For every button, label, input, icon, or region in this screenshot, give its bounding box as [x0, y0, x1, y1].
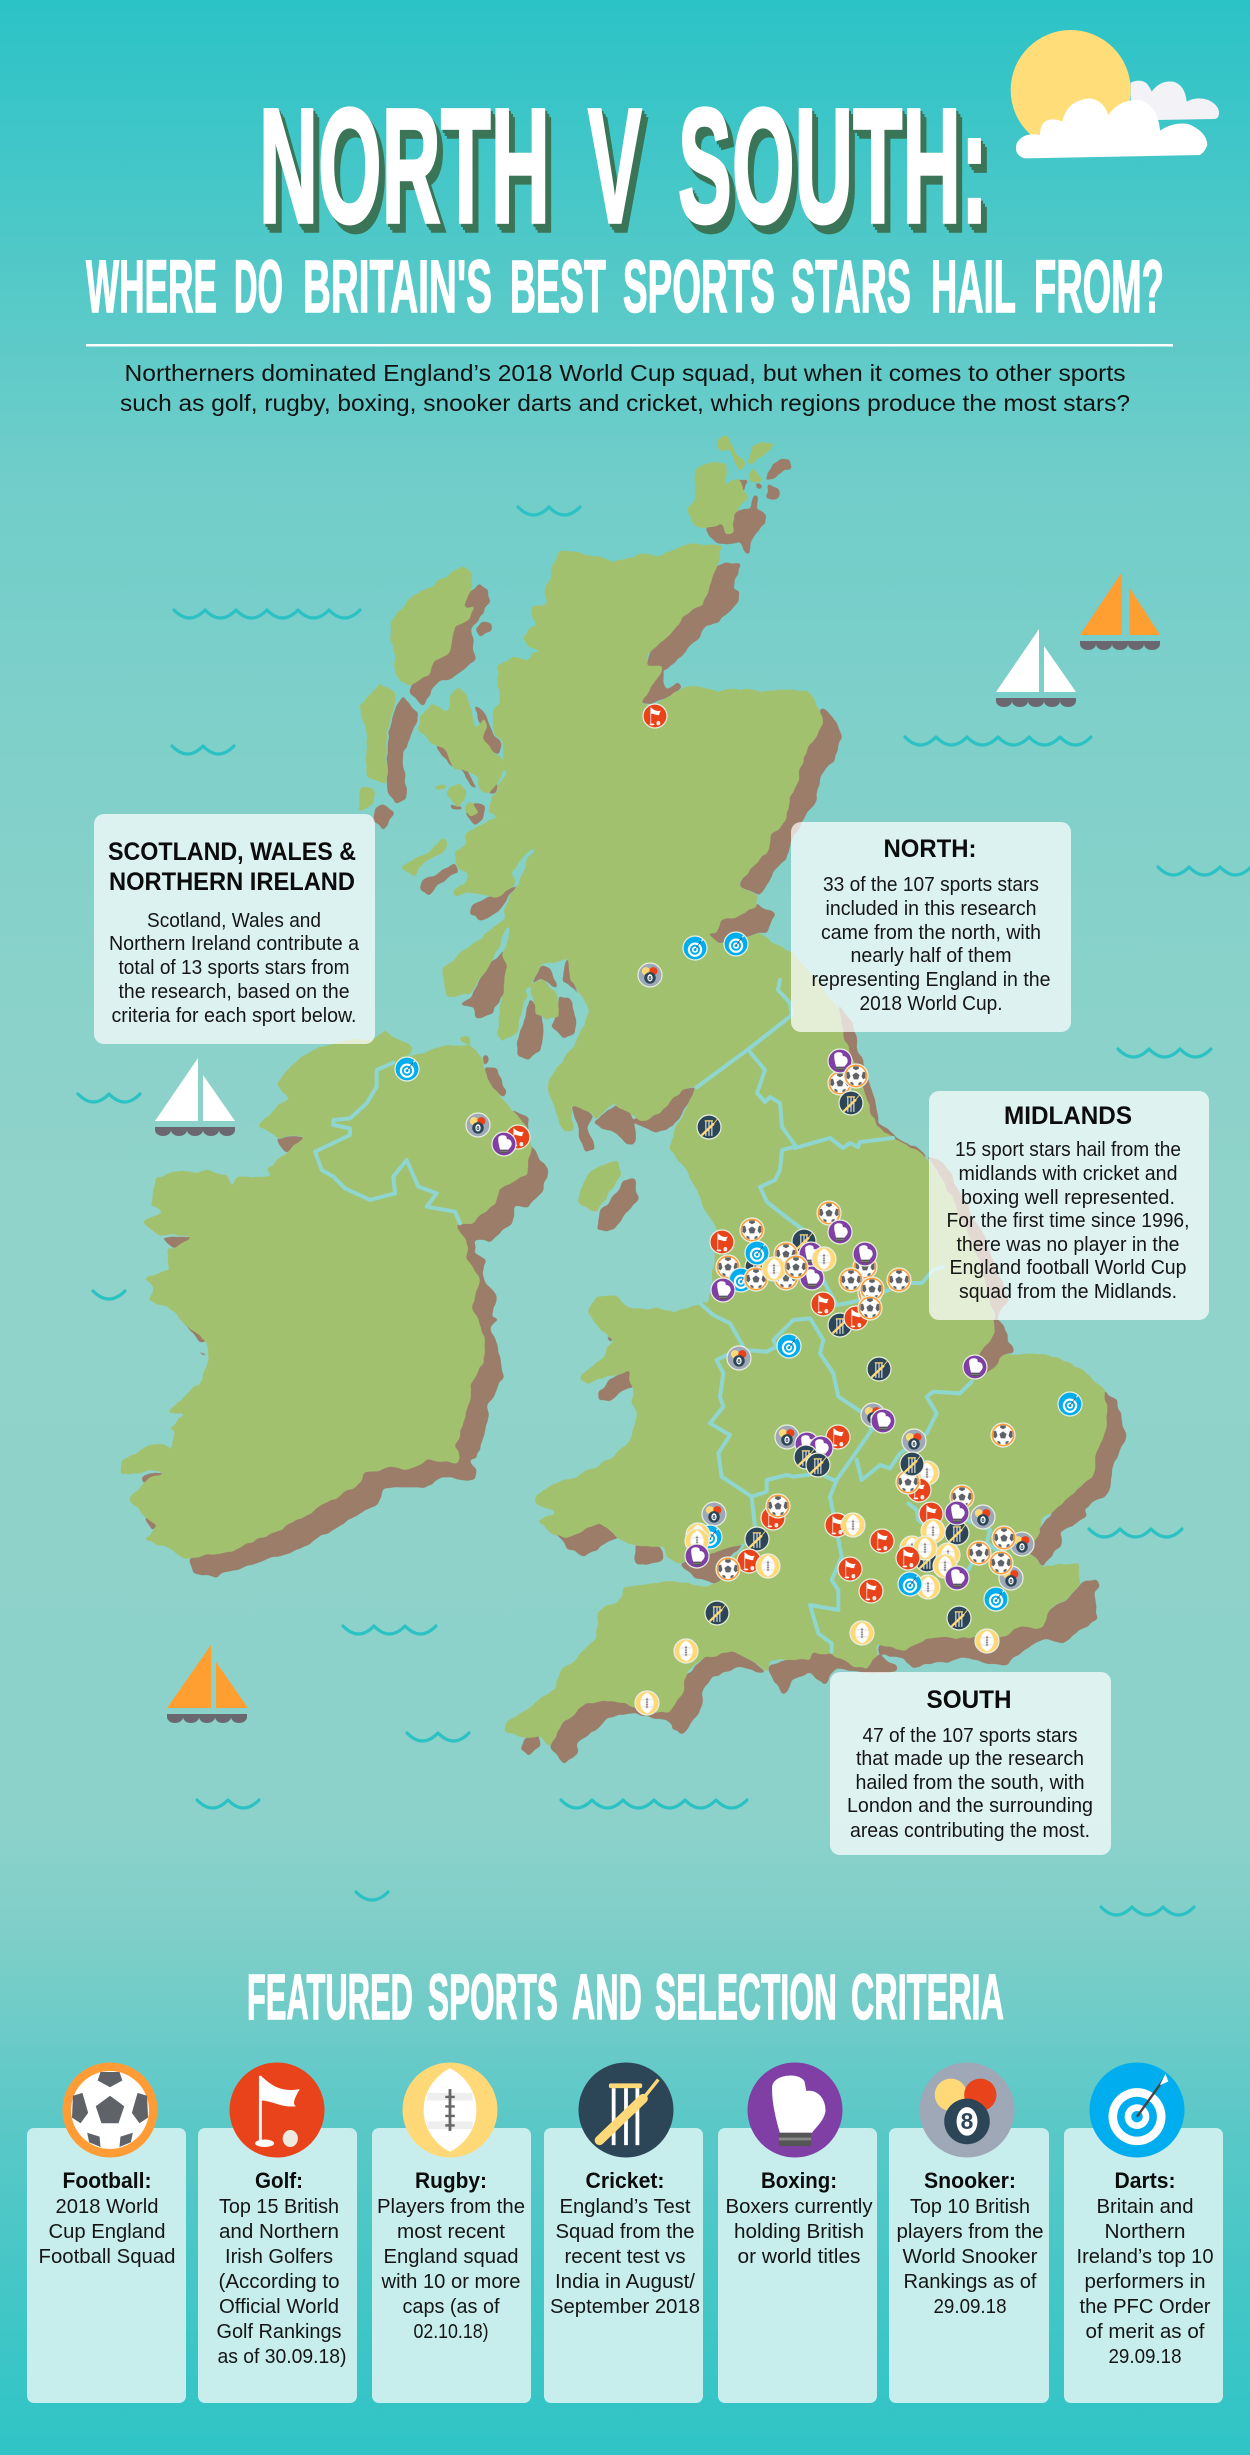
pin: cricket — [839, 1091, 863, 1115]
panel heading: SOUTH — [926, 1686, 1012, 1714]
pin: football — [774, 1266, 798, 1290]
panel heading: NORTHERN IRELAND — [109, 868, 355, 896]
pin: boxing — [711, 1278, 735, 1302]
section heading: featured sports: SELECTION — [655, 1961, 837, 2033]
card text — [726, 2168, 872, 2268]
card text: India in August/ — [555, 2271, 695, 2293]
panel body text: Northern Ireland contribute a — [109, 933, 360, 955]
card text: 2018 World — [56, 2196, 158, 2218]
pin: football — [784, 1255, 808, 1279]
pin: football — [853, 1255, 877, 1279]
pin: football — [774, 1242, 798, 1266]
panel body text: midlands with cricket and — [958, 1163, 1178, 1185]
pin: football — [817, 1201, 841, 1225]
panel body text — [812, 874, 1050, 1015]
decorative sea waves — [78, 507, 1250, 1915]
pin: golf — [737, 1549, 761, 1573]
subtitle: STARS — [791, 245, 911, 328]
panel body text: 47 of the 107 sports stars — [862, 1725, 1078, 1747]
icon: rugby — [402, 2062, 498, 2158]
icon: golf — [230, 2062, 324, 2158]
panel: Scotland, Wales and Northern Ireland — [94, 814, 375, 1044]
title: V — [588, 74, 642, 257]
panel body text: the research, based on the — [118, 981, 350, 1003]
pin: rugby — [841, 1513, 865, 1537]
panel body text: that made up the research — [856, 1748, 1084, 1770]
pin: snooker — [861, 1403, 885, 1427]
pin: golf — [919, 1502, 943, 1526]
pin: cricket — [705, 1601, 729, 1625]
card text: and Northern — [219, 2221, 339, 2243]
pin: football — [716, 1557, 740, 1581]
panel: Midlands — [929, 1091, 1209, 1320]
pin: golf — [506, 1125, 530, 1149]
pin: rugby — [762, 1257, 786, 1281]
panel body text — [109, 910, 360, 1027]
pin: football — [716, 1255, 740, 1279]
card text: Rugby: — [415, 2168, 487, 2193]
pin: boxing — [945, 1501, 969, 1525]
pin: cricket — [915, 1548, 939, 1572]
pin: rugby — [812, 1247, 836, 1271]
panel body text: For the first time since 1996, — [946, 1210, 1190, 1232]
pin: football — [766, 1494, 790, 1518]
panel body text: boxing well represented. — [961, 1187, 1175, 1209]
pin: football — [828, 1071, 852, 1095]
card text: Northern — [1104, 2221, 1186, 2243]
panel body text: included in this research — [826, 898, 1036, 920]
card: cricket — [544, 2062, 703, 2403]
card: snooker — [889, 2062, 1049, 2403]
pin: boxing — [795, 1432, 819, 1456]
pin: football — [844, 1064, 868, 1088]
pin: football — [839, 1268, 863, 1292]
pin: cricket — [792, 1229, 816, 1253]
panel: South — [830, 1672, 1111, 1855]
pin: darts — [729, 1268, 753, 1292]
subtitle: BRITAIN'S — [303, 245, 492, 328]
panel body text: criteria for each sport below. — [112, 1005, 356, 1027]
card text: Golf Rankings — [216, 2321, 342, 2343]
pin: darts — [898, 1572, 922, 1596]
icon: orange sailboat bottom — [167, 1645, 248, 1723]
icon: cricket — [578, 2062, 674, 2158]
card text — [550, 2168, 700, 2318]
subtitle: SPORTS — [623, 245, 775, 328]
card text: Top 15 British — [219, 2196, 339, 2218]
pin: football — [896, 1470, 920, 1494]
pin: boxing — [492, 1132, 516, 1156]
card: football — [27, 2062, 186, 2403]
subtitle: WHERE — [86, 245, 217, 328]
card text: holding British — [734, 2221, 864, 2243]
section heading: featured sports: FEATURED — [247, 1961, 413, 2033]
panel body text: England football World Cup — [950, 1257, 1186, 1279]
pin: darts — [984, 1587, 1008, 1611]
card text: the PFC Order — [1080, 2296, 1211, 2318]
pin: golf — [907, 1478, 931, 1502]
card text: Rankings as of — [904, 2271, 1037, 2293]
pin: football — [967, 1541, 991, 1565]
pin: darts — [777, 1334, 801, 1358]
pin: boxing — [828, 1220, 852, 1244]
pin: darts — [724, 932, 748, 956]
card text — [216, 2168, 346, 2368]
card text: World Snooker — [902, 2246, 1038, 2268]
card text: Squad from the — [556, 2221, 694, 2243]
intro text: Northerners dominated England’s 2018 World Cup squad, but when it comes to other sports — [124, 360, 1126, 386]
card: darts — [1064, 2062, 1223, 2403]
pin: football — [992, 1526, 1016, 1550]
card text — [377, 2168, 525, 2343]
panel body text: London and the surrounding — [847, 1795, 1093, 1817]
panel heading: MIDLANDS — [1004, 1102, 1132, 1130]
pin: boxing — [828, 1049, 852, 1073]
pin: football — [991, 1423, 1015, 1447]
panel body text: areas contributing the most. — [850, 1820, 1090, 1842]
section heading: featured sports: CRITERIA — [851, 1961, 1004, 2033]
map: coastline shadow — [142, 460, 1125, 1765]
panel heading: NORTH: — [884, 835, 976, 863]
card text: September 2018 — [550, 2296, 700, 2318]
icon: white sailboat left — [155, 1058, 235, 1136]
pin: darts — [745, 1241, 769, 1265]
pin: football — [858, 1296, 882, 1320]
card text: (According to — [218, 2271, 340, 2293]
panel body text: squad from the Midlands. — [959, 1281, 1177, 1303]
card text: Britain and — [1096, 2196, 1194, 2218]
pin: cricket — [806, 1453, 830, 1477]
subtitle: DO — [234, 245, 283, 328]
card text: Irish Golfers — [225, 2246, 333, 2268]
pin: football — [740, 1218, 764, 1242]
icon: darts — [1090, 2062, 1184, 2158]
pin: boxing — [685, 1544, 709, 1568]
pin: golf — [811, 1292, 835, 1316]
pin: golf — [710, 1230, 734, 1254]
panel body text: representing England in the — [812, 969, 1050, 991]
pin: darts — [395, 1057, 419, 1081]
pin: football — [744, 1267, 768, 1291]
icon: boxing — [748, 2062, 842, 2158]
pin: boxing — [945, 1566, 969, 1590]
pin: cricket — [745, 1255, 769, 1279]
pin: cricket — [945, 1521, 969, 1545]
card text: Cricket: — [586, 2168, 664, 2193]
pin: boxing — [809, 1436, 833, 1460]
pin: cricket — [828, 1313, 852, 1337]
card text: players from the — [896, 2221, 1044, 2243]
map pins — [395, 704, 1082, 1715]
panel body text: total of 13 sports stars from — [118, 957, 350, 979]
panel heading: SCOTLAND, WALES & — [108, 838, 356, 866]
pin: boxing — [800, 1266, 824, 1290]
pin: rugby — [913, 1536, 937, 1560]
pin: football — [860, 1277, 884, 1301]
panel body text — [946, 1139, 1190, 1303]
pin: snooker — [775, 1425, 799, 1449]
pin: rugby — [674, 1639, 698, 1663]
icon: orange sailboat top — [1080, 572, 1160, 650]
card text: Football: — [62, 2168, 152, 2193]
card text — [1076, 2168, 1214, 2368]
pin: football — [950, 1485, 974, 1509]
pin: snooker — [1010, 1532, 1034, 1556]
pin: golf — [859, 1579, 883, 1603]
pin: rugby — [900, 1536, 924, 1560]
section heading: featured sports: AND — [572, 1961, 642, 2033]
pin: snooker — [971, 1505, 995, 1529]
card text: 02.10.18) — [414, 2321, 488, 2343]
card: rugby — [372, 2062, 531, 2403]
pin: rugby — [756, 1554, 780, 1578]
intro text: such as golf, rugby, boxing, snooker darts and cricket, which regions produce the most stars? — [120, 390, 1130, 416]
card text: Players from the — [377, 2196, 525, 2218]
pin: cricket — [794, 1445, 818, 1469]
card: boxing — [718, 2062, 877, 2403]
pin: rugby — [916, 1575, 940, 1599]
panel body text: there was no player in the — [956, 1234, 1180, 1256]
pin: rugby — [915, 1461, 939, 1485]
pin: golf — [643, 704, 667, 728]
card text: England squad — [384, 2246, 518, 2268]
card text: 29.09.18 — [934, 2296, 1006, 2318]
subtitle — [86, 245, 1164, 328]
card text: or world titles — [738, 2246, 860, 2268]
pin: rugby — [635, 1691, 659, 1715]
pin: golf — [826, 1425, 850, 1449]
section heading: featured sports — [247, 1961, 1004, 2033]
illustration: sun and clouds — [1011, 30, 1219, 158]
card text: caps (as of — [402, 2296, 500, 2318]
pin: rugby — [933, 1554, 957, 1578]
pin: golf — [870, 1529, 894, 1553]
pin: football — [989, 1551, 1013, 1575]
pin: snooker — [702, 1502, 726, 1526]
pin: football — [858, 1281, 882, 1305]
pin: snooker — [638, 963, 662, 987]
card text: Football Squad — [38, 2246, 176, 2268]
pin: football — [887, 1268, 911, 1292]
pin: rugby — [936, 1543, 960, 1567]
card text: recent test vs — [564, 2246, 686, 2268]
pin: golf — [844, 1306, 868, 1330]
card text: Boxers currently — [726, 2196, 872, 2218]
pin: cricket — [745, 1527, 769, 1551]
icon: football — [62, 2062, 157, 2158]
subtitle: BEST — [510, 245, 606, 328]
map: region borders — [315, 980, 997, 1652]
card text: Darts: — [1114, 2168, 1176, 2193]
card text — [896, 2168, 1044, 2318]
panel body text: nearly half of them — [850, 945, 1012, 967]
card text: Snooker: — [924, 2168, 1016, 2193]
map: British Isles landmass — [118, 435, 1107, 1747]
pin: cricket — [697, 1115, 721, 1139]
card text: most recent — [397, 2221, 505, 2243]
card: golf — [198, 2062, 357, 2403]
card text: Golf: — [255, 2168, 303, 2193]
card text — [38, 2168, 176, 2268]
icon: snooker — [920, 2062, 1014, 2158]
pin: golf — [896, 1546, 920, 1570]
card text: 29.09.18 — [1108, 2346, 1182, 2368]
pin: boxing — [799, 1242, 823, 1266]
title: NORTH — [259, 74, 550, 257]
pin: rugby — [921, 1519, 945, 1543]
panel body text: came from the north, with — [821, 922, 1041, 944]
card text: Cup England — [48, 2221, 166, 2243]
panel body text: hailed from the south, with — [856, 1772, 1084, 1794]
pin: cricket — [947, 1606, 971, 1630]
pin: rugby — [685, 1529, 709, 1553]
pin: boxing — [871, 1409, 895, 1433]
intro text — [120, 360, 1130, 416]
pin: cricket — [900, 1452, 924, 1476]
pin: cricket — [867, 1357, 891, 1381]
panel: North — [791, 822, 1071, 1032]
card text: as of 30.09.18) — [218, 2346, 346, 2368]
panel heading — [108, 838, 356, 896]
panel body text: Scotland, Wales and — [147, 910, 321, 932]
pin: boxing — [853, 1242, 877, 1266]
pin: darts — [683, 936, 707, 960]
pin: golf — [838, 1557, 862, 1581]
card text: Ireland’s top 10 — [1076, 2246, 1214, 2268]
panel body text — [847, 1725, 1093, 1842]
card text: Boxing: — [761, 2168, 837, 2193]
pin: darts — [698, 1525, 722, 1549]
card text: Official World — [219, 2296, 339, 2318]
pin: snooker — [999, 1566, 1023, 1590]
icon: white sailboat top — [996, 629, 1076, 707]
panel body text: 33 of the 107 sports stars — [823, 874, 1039, 896]
pin: rugby — [850, 1621, 874, 1645]
pin: golf — [761, 1506, 785, 1530]
card text: performers in — [1084, 2271, 1206, 2293]
card text: of merit as of — [1086, 2321, 1205, 2343]
pin: snooker — [902, 1429, 926, 1453]
panel body text: 2018 World Cup. — [860, 993, 1002, 1015]
section heading: featured sports: SPORTS — [428, 1961, 558, 2033]
panel body text: 15 sport stars hail from the — [955, 1139, 1181, 1161]
pin: golf — [825, 1513, 849, 1537]
pin: darts — [1058, 1392, 1082, 1416]
card text: England’s Test — [560, 2196, 691, 2218]
pin: snooker — [727, 1346, 751, 1370]
pin: rugby — [975, 1629, 999, 1653]
pin: snooker — [466, 1113, 490, 1137]
subtitle: HAIL — [931, 245, 1016, 328]
card text: Top 10 British — [910, 2196, 1030, 2218]
card text: with 10 or more — [380, 2271, 520, 2293]
pin: rugby — [686, 1523, 710, 1547]
pin: boxing — [963, 1355, 987, 1379]
